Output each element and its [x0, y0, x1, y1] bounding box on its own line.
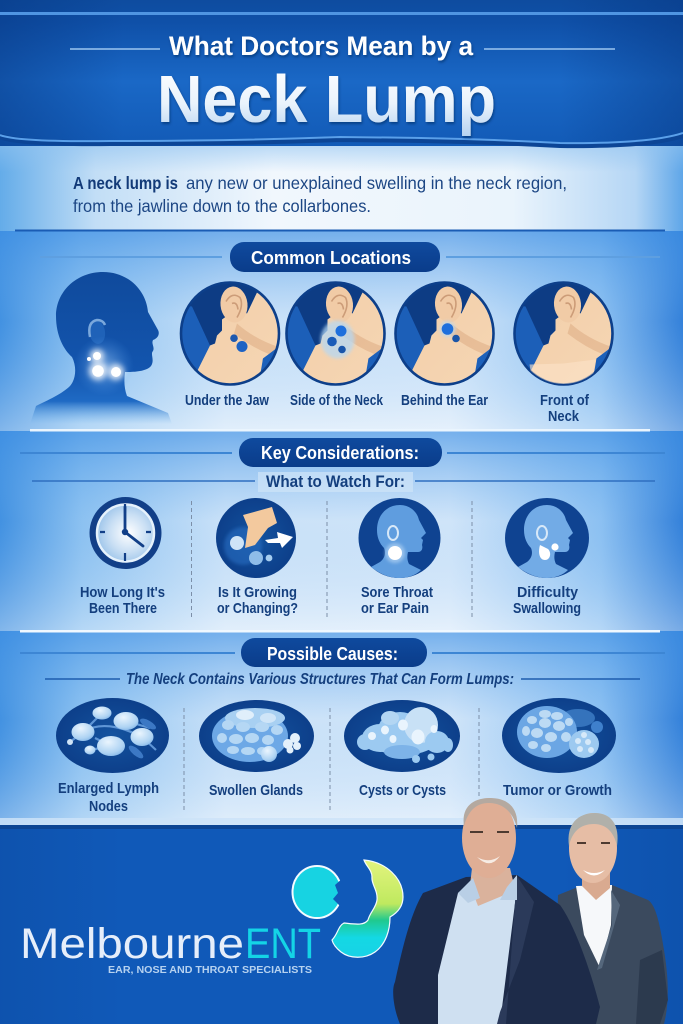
consideration labels: Swallowing [513, 600, 581, 617]
photo: left doctor [393, 798, 600, 1024]
logo: Melbourne ENT: Melbourne [20, 920, 244, 968]
cause labels: Nodes [89, 798, 128, 815]
location labels: Side of the Neck [290, 392, 384, 409]
icon: swollen glands [199, 700, 314, 772]
intro text: any new or unexplained swelling in the neck region, [186, 173, 567, 193]
dashed separators [184, 501, 479, 813]
cause labels: Swollen Glands [209, 782, 303, 799]
logo: Melbourne ENT: EAR, NOSE AND THROAT SPECIALISTS [108, 964, 312, 976]
icon: growing or changing [216, 498, 296, 578]
intro text [73, 173, 567, 216]
consideration labels: Been There [89, 600, 157, 617]
icon: front of neck [513, 281, 614, 386]
consideration labels: or Changing? [217, 600, 298, 617]
icon: cysts [344, 700, 460, 772]
logo: Melbourne ENT [20, 860, 403, 976]
icon: difficulty swallowing [505, 498, 589, 578]
title: What Doctors Mean by a [169, 31, 474, 61]
footer band [0, 818, 683, 1024]
icon: enlarged lymph nodes [56, 698, 169, 773]
intro text: from the jawline down to the collarbones. [73, 196, 371, 216]
cause labels: Enlarged Lymph [58, 780, 159, 797]
cause labels: Tumor or Growth [503, 782, 612, 799]
icon: side of the neck [276, 274, 390, 388]
heading: key considerations [20, 438, 665, 467]
subheading: structures: The Neck Contains Various Structures That Can Form Lumps: [126, 671, 514, 688]
consideration labels: Is It Growing [218, 584, 297, 601]
location labels: Behind the Ear [401, 392, 488, 409]
heading: key considerations: Key Considerations: [261, 443, 419, 463]
icon: clock [90, 497, 162, 569]
subheading: what to watch for: What to Watch For: [266, 472, 405, 491]
title: Neck Lump [157, 62, 496, 137]
location labels: Neck [548, 408, 580, 425]
location labels [185, 392, 590, 425]
intro panel [0, 146, 683, 231]
location labels: Front of [540, 392, 590, 409]
photo: right doctor [556, 813, 668, 1024]
consideration labels [80, 584, 581, 617]
consideration labels: or Ear Pain [361, 600, 429, 617]
consideration labels: Difficulty [517, 584, 579, 601]
intro text: A neck lump is [73, 173, 178, 193]
icon: sore throat or ear pain [358, 498, 440, 578]
heading: common locations [40, 242, 660, 272]
header band [0, 0, 683, 148]
icon: head silhouette with glowing lumps [30, 272, 172, 424]
title [70, 31, 615, 137]
icon: under the jaw [170, 274, 284, 388]
subheading: what to watch for [32, 472, 655, 492]
icon: behind the ear [384, 274, 498, 388]
cause labels: Cysts or Cysts [359, 782, 446, 799]
logo: Melbourne ENT: ENT [245, 920, 321, 968]
wave divider [0, 133, 683, 145]
heading: common locations: Common Locations [251, 248, 411, 268]
section backgrounds [0, 230, 683, 826]
consideration labels: Sore Throat [361, 584, 433, 601]
heading: possible causes: Possible Causes: [267, 644, 398, 664]
logo mark [292, 860, 403, 957]
cause labels [58, 780, 612, 815]
location labels: Under the Jaw [185, 392, 269, 409]
icon: tumor or growth [502, 698, 616, 773]
heading: possible causes [20, 638, 665, 667]
consideration labels: How Long It's [80, 584, 165, 601]
